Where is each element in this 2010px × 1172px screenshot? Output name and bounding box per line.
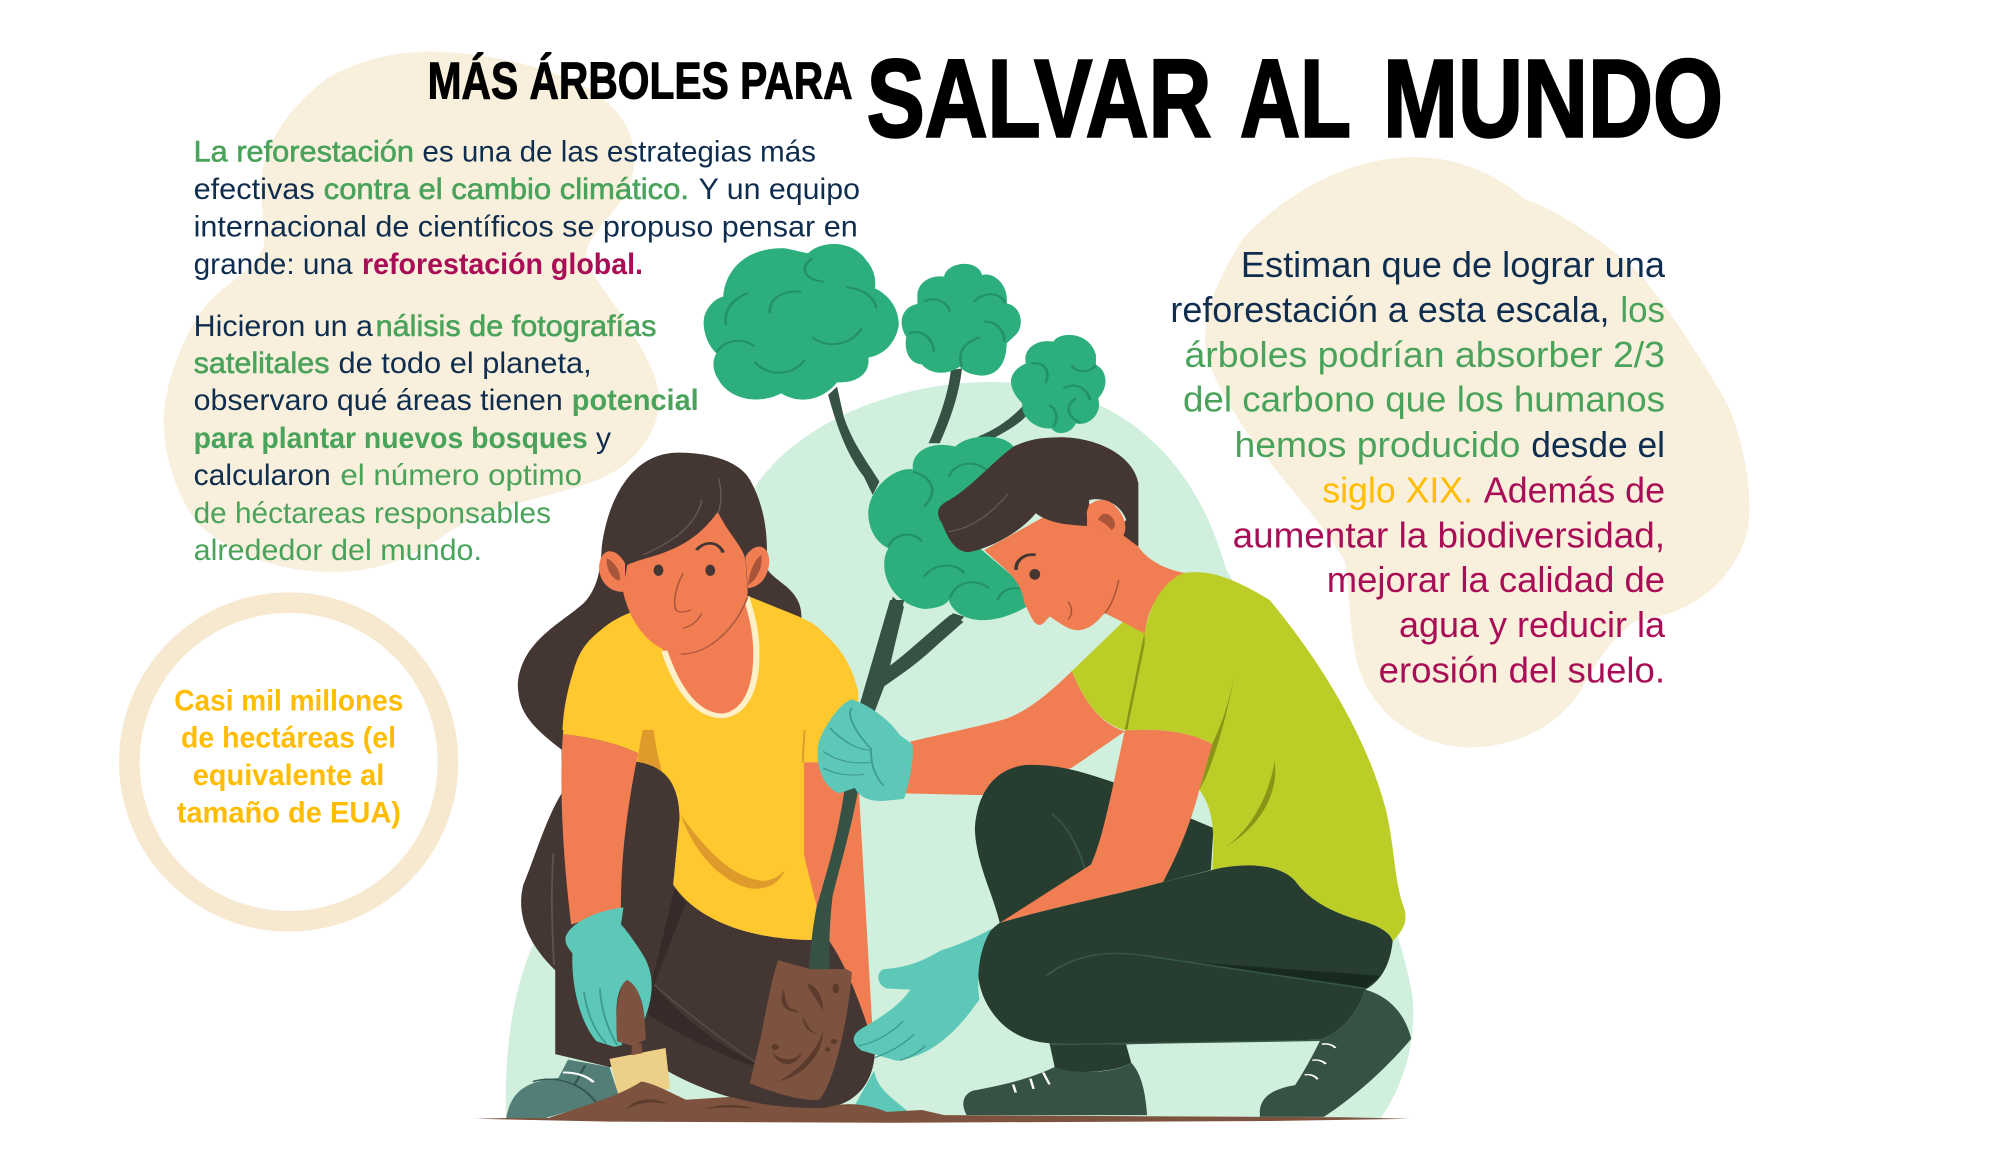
illustration: man xyxy=(818,437,1411,1117)
callout circle: million hectares: de hectáreas (el xyxy=(181,722,396,755)
text block: satellite analysis paragraph: y xyxy=(596,422,611,455)
text block: satellite analysis paragraph: calcularon xyxy=(194,459,331,492)
text block: intro paragraph: grande: una xyxy=(194,248,353,281)
text block: satellite analysis paragraph: Hicieron un a xyxy=(194,310,373,343)
mint background shape xyxy=(506,382,1413,1118)
text block: right paragraph: Además de xyxy=(1484,470,1665,511)
text block: satellite analysis paragraph: para plantar nuevos bosques xyxy=(194,422,588,455)
text block: satellite analysis paragraph: nálisis de fotografías xyxy=(376,310,656,343)
text block: satellite analysis paragraph: satelitales xyxy=(194,347,330,380)
ground and soil xyxy=(476,1082,1410,1123)
text block: intro paragraph: contra el cambio climático. xyxy=(324,173,689,206)
text block: satellite analysis paragraph: de héctareas responsables xyxy=(194,497,551,530)
text block: intro paragraph: La reforestación xyxy=(194,136,414,168)
text block: intro paragraph: internacional de científicos se propuso pensar en xyxy=(194,210,858,244)
text block: satellite analysis paragraph: alrededor del mundo. xyxy=(194,534,482,567)
text block: right paragraph: siglo XIX. xyxy=(1322,470,1473,511)
title: SALVAR xyxy=(867,38,1211,161)
text block: satellite analysis paragraph xyxy=(194,310,699,567)
text block: right paragraph: desde el xyxy=(1531,424,1665,465)
text block: right paragraph: agua y reducir la xyxy=(1399,604,1666,645)
illustration: woman xyxy=(506,453,909,1118)
text block: satellite analysis paragraph: potencial xyxy=(572,384,699,417)
title: AL xyxy=(1240,38,1351,161)
text block: satellite analysis paragraph: de todo el planeta, xyxy=(338,347,592,380)
text block: intro paragraph xyxy=(194,136,860,281)
text block: right paragraph: erosión del suelo. xyxy=(1379,650,1665,691)
title: MUNDO xyxy=(1383,38,1723,161)
text block: right paragraph: mejorar la calidad de xyxy=(1327,559,1665,600)
title: MÁS ÁRBOLES PARA xyxy=(428,52,853,110)
callout circle: million hectares: tamaño de EUA) xyxy=(177,796,401,829)
text block: right paragraph: aumentar la biodiversidad, xyxy=(1233,514,1665,556)
text block: right paragraph: Estiman que de lograr una xyxy=(1241,244,1666,285)
background blob: right xyxy=(1205,157,1749,747)
text block: right paragraph: los xyxy=(1620,289,1665,330)
callout circle: million hectares xyxy=(129,603,448,921)
text block: right paragraph: del carbono que los humanos xyxy=(1183,379,1665,420)
text block: satellite analysis paragraph: observaro qué áreas tienen xyxy=(194,384,563,417)
text block: intro paragraph: efectivas xyxy=(194,173,315,206)
text block: intro paragraph: reforestación global. xyxy=(362,248,643,281)
text block: intro paragraph: Y un equipo xyxy=(699,173,860,206)
text block: satellite analysis paragraph: el número optimo xyxy=(340,459,582,492)
text block: right paragraph: reforestación a esta escala, xyxy=(1170,289,1610,330)
text block: right paragraph xyxy=(1170,244,1666,691)
background blob: left xyxy=(163,52,659,572)
callout circle: million hectares: Casi mil millones xyxy=(174,685,403,718)
callout circle: million hectares: equivalente al xyxy=(193,759,384,792)
illustration: sapling tree xyxy=(704,244,1106,969)
text block: intro paragraph: es una de las estrategias más xyxy=(422,136,816,168)
text block: right paragraph: hemos producido xyxy=(1234,424,1520,465)
title xyxy=(428,38,1723,161)
text block: right paragraph: árboles podrían absorber 2/3 xyxy=(1184,334,1665,375)
